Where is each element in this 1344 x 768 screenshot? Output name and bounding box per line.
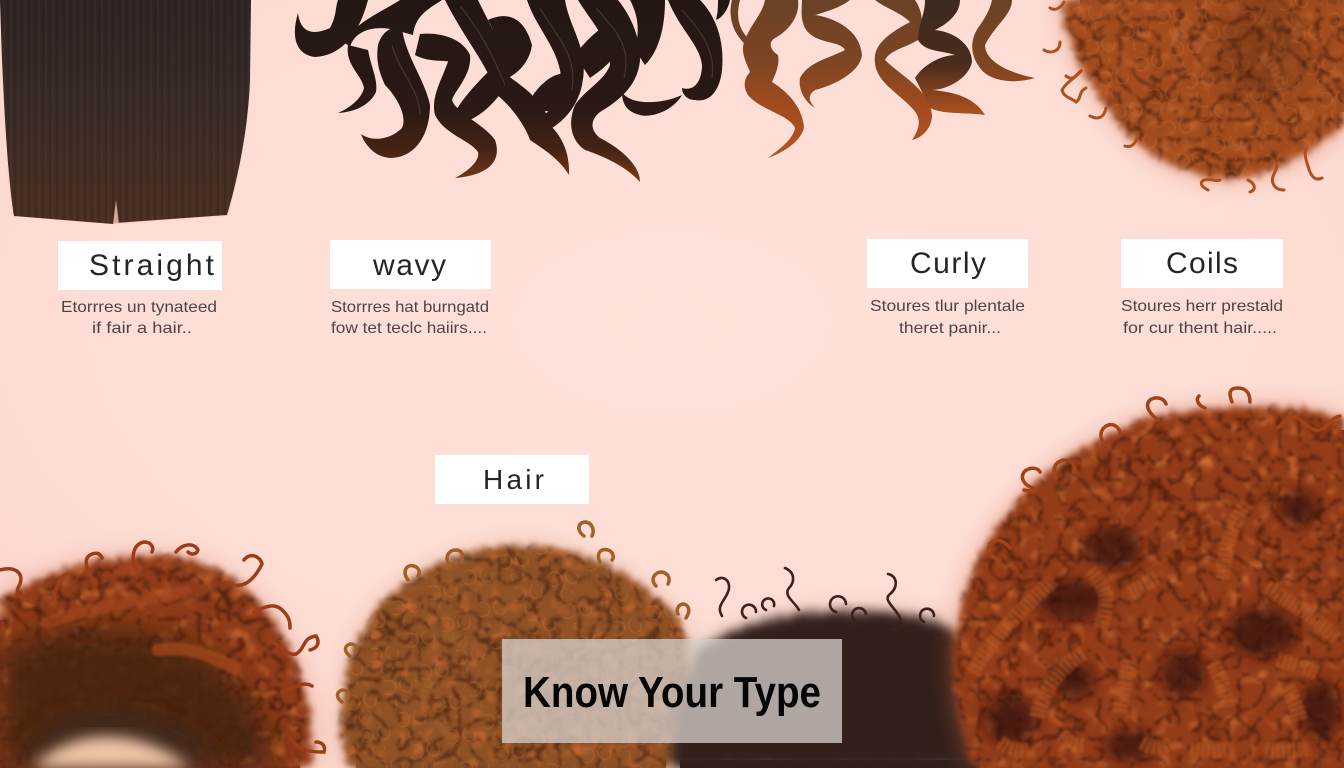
label: Curly: Curly [910, 247, 986, 280]
hair swatch: dark wavy [295, 0, 730, 182]
hair swatch: coils top right [1044, 0, 1344, 192]
label: wavy: wavy [372, 249, 446, 282]
description: Coils: Stoures herr prestald [1121, 298, 1283, 315]
title banner [502, 639, 842, 743]
label: Straight: Straight [89, 249, 215, 282]
label: Hair: Hair [483, 464, 544, 495]
description: Curly [870, 298, 1025, 337]
description: Coils: for cur thent hair..... [1123, 320, 1277, 337]
description: Straight: if fair a hair.. [92, 320, 192, 337]
description: Straight: Etorrres un tynateed [61, 299, 217, 316]
description: wavy [331, 299, 489, 337]
description: Curly: Stoures tlur plentale [870, 298, 1025, 315]
description: Straight [61, 299, 217, 337]
hair swatch: large auburn coils right [954, 388, 1344, 768]
hair swatch: straight [0, 0, 251, 224]
hair swatch: dark coily [672, 568, 989, 768]
description: wavy: Storrres hat burngatd [331, 299, 489, 316]
description: Curly: theret panir... [899, 320, 1001, 337]
hair swatch: bottom left curly with forehead [0, 542, 325, 768]
label: Straight [58, 241, 222, 290]
hair swatch: auburn wavy [731, 0, 1035, 158]
label: Coils [1121, 239, 1283, 288]
description: Coils [1121, 298, 1283, 337]
label: Coils: Coils [1166, 247, 1238, 280]
title banner: Know Your Type [523, 668, 821, 717]
label: wavy [330, 240, 491, 289]
label: Hair [435, 455, 589, 504]
hair swatch: mid brown curly [338, 522, 692, 768]
description: wavy: fow tet teclc haiirs.... [331, 320, 487, 337]
label: Curly [867, 239, 1028, 288]
